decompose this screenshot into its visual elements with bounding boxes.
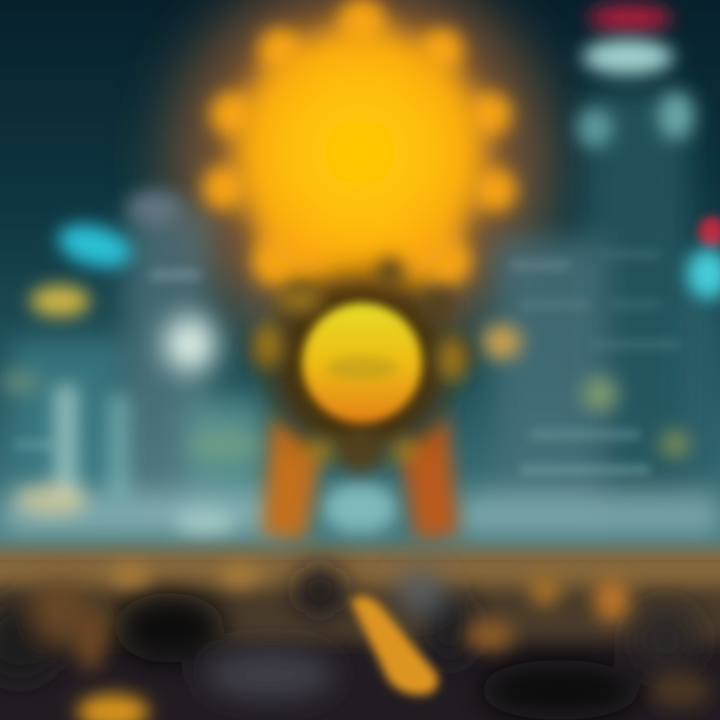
city: centre gap under medal [322, 482, 398, 534]
award badge [250, 258, 473, 540]
city: right buildings [455, 90, 720, 535]
badge: gold highlights [256, 290, 464, 460]
background: night sky [0, 0, 720, 560]
light streaks: left tower [0, 370, 261, 536]
city: window speckles [15, 250, 680, 474]
badge: medal face [302, 303, 422, 423]
right signs: red and white lights [577, 4, 720, 300]
sun: disc [232, 24, 488, 280]
badge: ribbons [262, 415, 458, 540]
ground: crowd shapes [0, 566, 699, 720]
ground: bottom-left glow [77, 694, 149, 720]
city: left buildings [0, 210, 280, 535]
ground: orange streak [350, 596, 438, 695]
sun: lower body [265, 180, 455, 300]
ground: orange crowd dots [74, 563, 710, 708]
sun: rays [202, 0, 517, 286]
ground: crowd base [0, 548, 720, 720]
left signs: cyan and yellow lights [30, 190, 216, 372]
sun glow [170, 0, 550, 350]
badge: gear ring [270, 275, 450, 455]
badge: medal inscription band [326, 356, 398, 380]
window lights: right [482, 324, 690, 459]
